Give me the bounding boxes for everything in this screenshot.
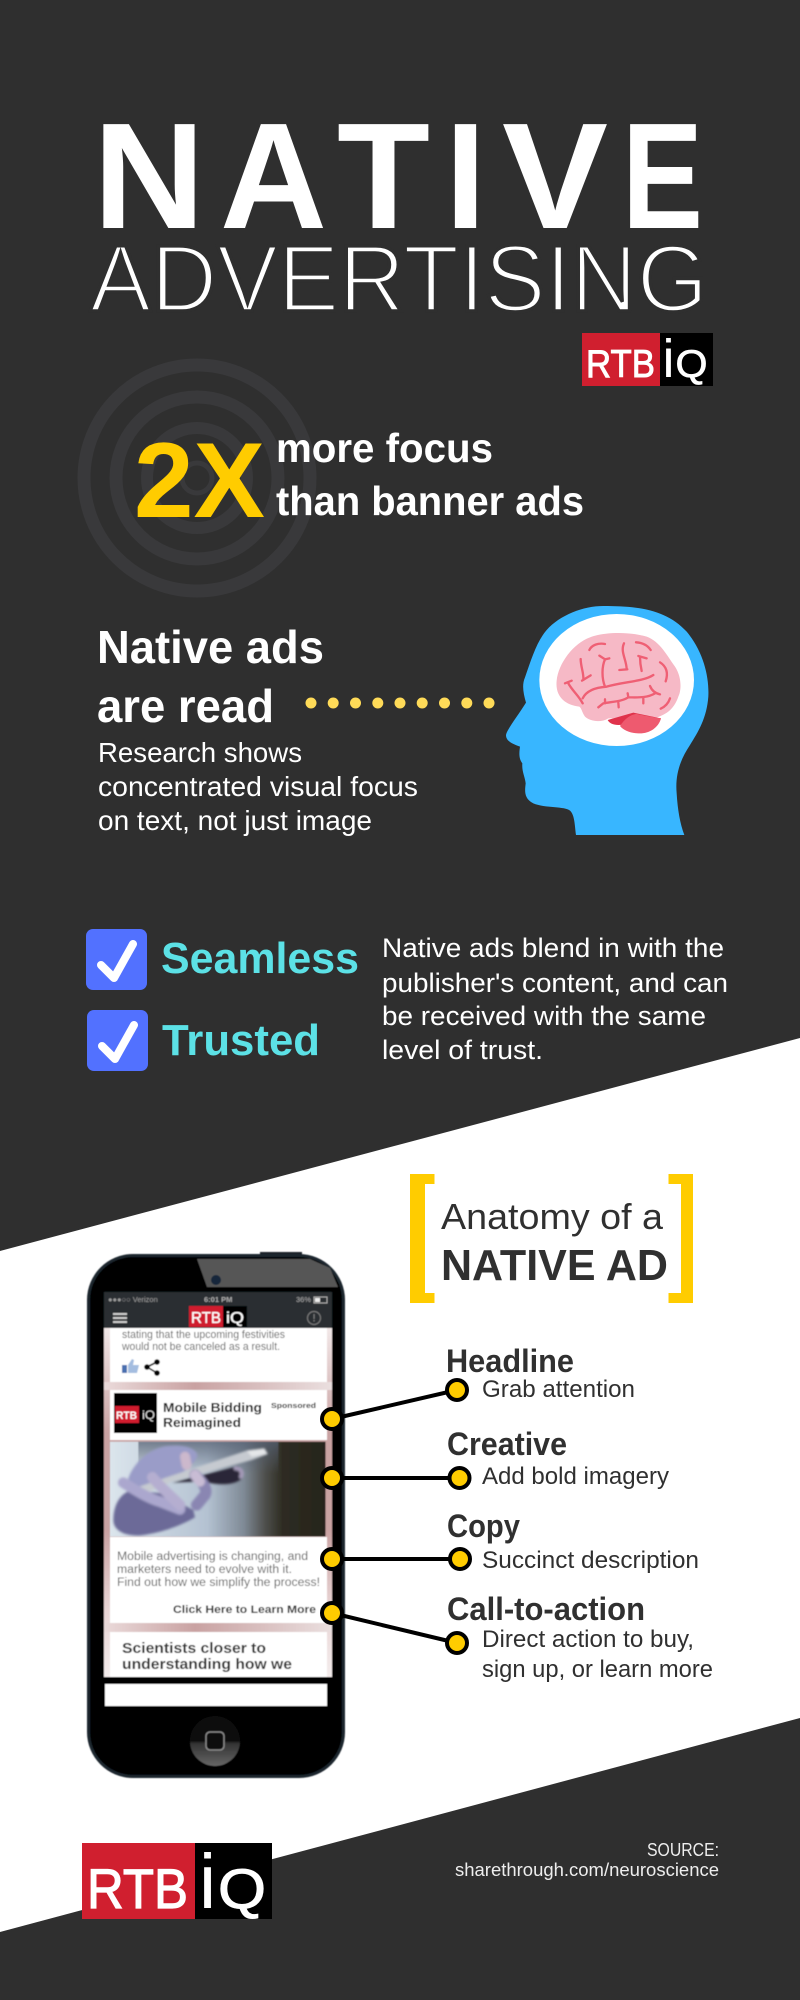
stat: 2X more focus: than banner ads	[276, 478, 584, 524]
label: headline	[446, 1343, 635, 1403]
text block: native ads are read: Native ads	[97, 621, 324, 673]
phone screen: Scientists closer to	[122, 1640, 266, 1657]
logo: RTB iQ small: Q	[676, 343, 708, 386]
icon: head with brain	[506, 606, 708, 835]
white diagonal panel	[0, 1038, 800, 1932]
text block: native ads are read	[97, 621, 418, 836]
text block: blend description: be received with the same	[382, 1001, 706, 1031]
logo: RTB iQ large	[82, 1839, 272, 1925]
title: A	[220, 91, 327, 260]
screen logo	[189, 1306, 223, 1327]
label: headline: Grab attention	[482, 1376, 635, 1403]
title: I	[445, 91, 486, 260]
text block: native ads are read: are read	[97, 680, 274, 732]
label: call-to-action	[447, 1591, 713, 1683]
phone screen: stating that the upcoming festivities	[122, 1329, 285, 1341]
heading: anatomy of a native ad	[410, 1174, 693, 1303]
heading: anatomy of a native ad: NATIVE AD	[441, 1241, 668, 1290]
phone screen: RTB	[191, 1310, 221, 1327]
phone screen	[104, 1292, 332, 1677]
connector: call-to-action	[322, 1603, 467, 1653]
label: copy: Succinct description	[482, 1547, 699, 1574]
connector: creative	[322, 1468, 470, 1488]
logo: RTB iQ large: RTB	[87, 1857, 188, 1920]
stat: 2X more focus	[134, 420, 584, 540]
checkbox: trusted: Trusted	[162, 1016, 320, 1065]
phone screen: iQ	[226, 1310, 244, 1327]
phone screen: Click Here to Learn More	[173, 1604, 316, 1616]
title: E	[622, 91, 703, 260]
phone screen: 36%	[296, 1295, 311, 1304]
phone screen: 6:01 PM	[204, 1295, 232, 1304]
logo: RTB iQ small: RTB	[586, 343, 655, 386]
title	[90, 91, 708, 332]
logo: RTB iQ small: i	[662, 329, 674, 389]
title: V	[502, 91, 608, 260]
label: copy: Copy	[447, 1508, 520, 1544]
phone mockup	[87, 1252, 345, 1778]
label: creative: Creative	[447, 1426, 567, 1462]
dotted line to head	[306, 698, 494, 708]
connector: copy	[322, 1549, 470, 1569]
source note: SOURCE:	[647, 1840, 719, 1860]
text block: native ads are read: Research shows	[98, 737, 302, 768]
text block: blend description	[382, 933, 728, 1065]
checkbox: seamless: Seamless	[161, 934, 359, 983]
native ad headline card	[110, 1390, 327, 1440]
connector: headline	[322, 1380, 467, 1429]
phone screen: iQ	[142, 1408, 155, 1422]
stat: 2X more focus: more focus	[276, 425, 493, 471]
source note	[455, 1840, 719, 1880]
text block: blend description: publisher's content, and can	[382, 968, 728, 998]
phone screen: Find out how we simplify the process!	[117, 1577, 320, 1589]
phone screen: Reimagined	[163, 1415, 241, 1430]
phone screen: Mobile Bidding	[163, 1400, 262, 1415]
text block: blend description: Native ads blend in with the	[382, 933, 724, 963]
label: call-to-action: Direct action to buy,	[482, 1626, 694, 1653]
logo: RTB iQ large: Q	[218, 1857, 266, 1920]
title: T	[337, 91, 430, 260]
label: headline: Headline	[446, 1343, 574, 1379]
heading: anatomy of a native ad: Anatomy of a	[441, 1196, 664, 1237]
phone screen: RTB	[116, 1410, 137, 1422]
title: ADVERTISING	[90, 226, 708, 332]
phone screen: ●●●○○ Verizon	[108, 1295, 158, 1304]
top glass reflection	[197, 1259, 338, 1287]
logo: RTB iQ large: i	[199, 1839, 216, 1925]
phone screen: Mobile advertising is changing, and	[117, 1551, 308, 1563]
text block: blend description: level of trust.	[382, 1035, 543, 1065]
ad copy card	[110, 1537, 327, 1623]
label: creative	[447, 1426, 669, 1490]
next feed card	[110, 1632, 327, 1677]
bottom white bar	[105, 1684, 327, 1706]
label: creative: Add bold imagery	[482, 1463, 669, 1490]
phone screen: would not be canceled as a result.	[121, 1341, 280, 1353]
creative photo	[110, 1442, 326, 1537]
source note: sharethrough.com/neuroscience	[455, 1860, 719, 1880]
checkbox: seamless	[86, 929, 359, 990]
title: N	[93, 91, 205, 260]
checkbox: trusted	[87, 1010, 320, 1071]
stat: 2X more focus: 2X	[134, 420, 265, 540]
phone screen: marketers need to evolve with it.	[117, 1564, 292, 1576]
label: copy	[447, 1508, 699, 1574]
home button	[190, 1716, 240, 1766]
concentric focus rings	[84, 365, 310, 591]
feed card top	[110, 1328, 327, 1382]
label: call-to-action: sign up, or learn more	[482, 1656, 713, 1683]
phone screen: understanding how we	[122, 1656, 292, 1673]
label: call-to-action: Call-to-action	[447, 1591, 645, 1627]
phone screen: Sponsored	[271, 1401, 316, 1410]
logo: RTB iQ small	[582, 329, 713, 389]
camera	[211, 1275, 221, 1285]
text block: native ads are read: on text, not just image	[98, 805, 372, 836]
text block: native ads are read: concentrated visual focus	[98, 771, 418, 802]
